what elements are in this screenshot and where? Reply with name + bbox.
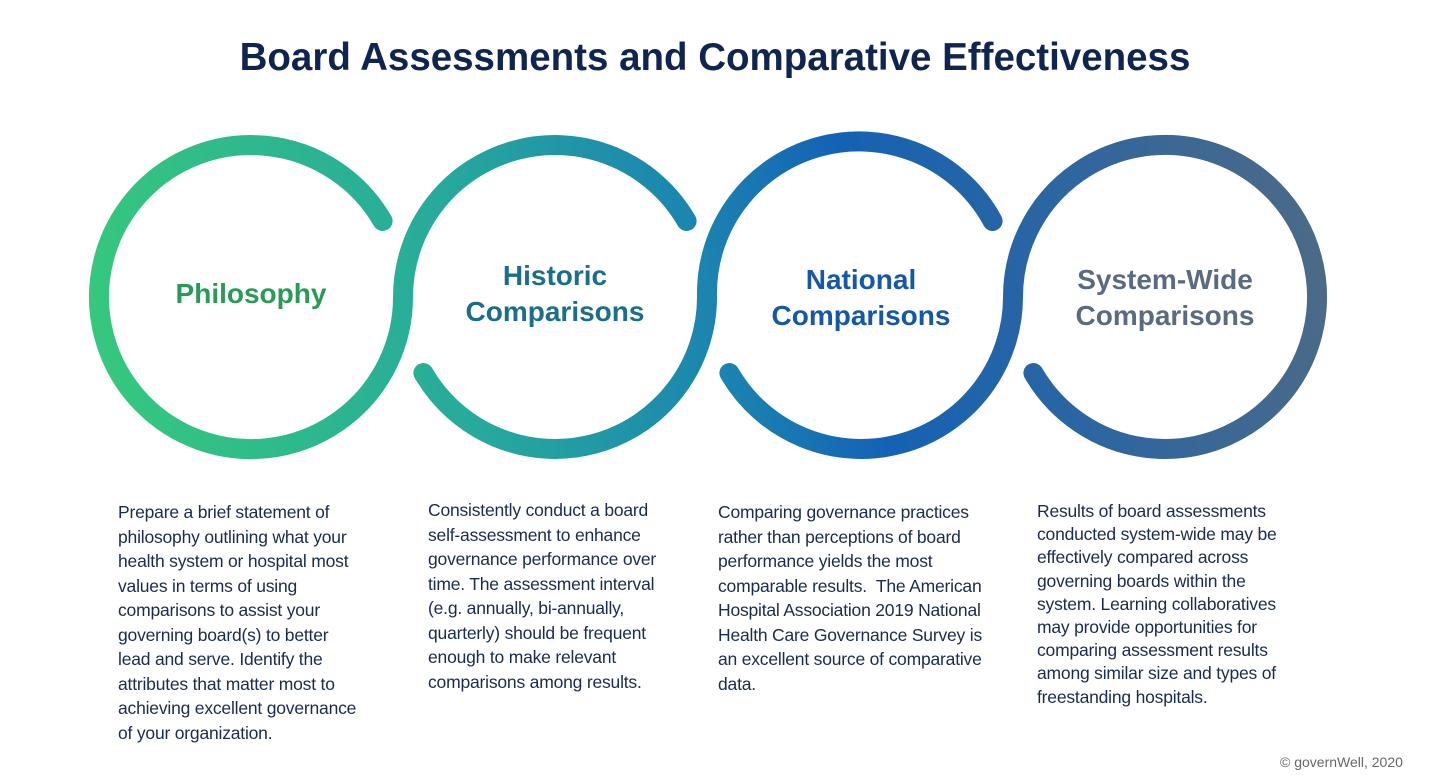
text: historic: Consistently conduct a board xyxy=(428,500,648,520)
text: philosophy xyxy=(118,502,356,742)
text: national: Comparing governance practices xyxy=(718,502,969,522)
text: historic: (e.g. annually, bi-annually, xyxy=(428,598,624,618)
heading: Historic Comparisons: Comparisons xyxy=(466,296,644,327)
heading: System-Wide Comparisons: Comparisons xyxy=(1076,300,1254,331)
text: philosophy: values in terms of using xyxy=(118,576,297,596)
text: system-wide: conducted system-wide may be xyxy=(1037,524,1277,544)
text: historic: governance performance over xyxy=(428,549,656,569)
text: philosophy: attributes that matter most to xyxy=(118,674,335,694)
text: system-wide: may provide opportunities for xyxy=(1037,617,1257,637)
text: national: comparable results. The American xyxy=(718,576,981,596)
text: system-wide: among similar size and types of xyxy=(1037,663,1276,683)
text: philosophy: of your organization. xyxy=(118,722,272,742)
text: historic: enough to make relevant xyxy=(428,647,616,667)
text: philosophy: lead and serve. Identify the xyxy=(118,649,323,669)
heading: System-Wide Comparisons: System-Wide xyxy=(1077,264,1253,295)
text: system-wide: comparing assessment results xyxy=(1037,640,1268,660)
text: system-wide: effectively compared across xyxy=(1037,547,1248,567)
text: historic: time. The assessment interval xyxy=(428,574,654,594)
text: national: rather than perceptions of board xyxy=(718,526,961,546)
text: system-wide: governing boards within the xyxy=(1037,571,1246,591)
text: system-wide xyxy=(1037,501,1277,707)
text: national: Health Care Governance Survey is xyxy=(718,624,982,644)
text: system-wide: system. Learning collaboratives xyxy=(1037,594,1276,614)
text: philosophy: governing board(s) to better xyxy=(118,624,328,644)
heading: Philosophy: Philosophy xyxy=(176,278,326,309)
text: national xyxy=(718,502,982,694)
text: national: an excellent source of comparative xyxy=(718,649,982,669)
text: national: performance yields the most xyxy=(718,551,932,571)
text: philosophy: philosophy outlining what your xyxy=(118,526,346,546)
heading: National Comparisons xyxy=(772,264,950,331)
heading: National Comparisons: Comparisons xyxy=(772,300,950,331)
text: philosophy: comparisons to assist your xyxy=(118,600,320,620)
heading: Historic Comparisons xyxy=(466,260,644,327)
text: system-wide: Results of board assessments xyxy=(1037,501,1266,521)
text: philosophy: health system or hospital most xyxy=(118,551,348,571)
text: national: Hospital Association 2019 National xyxy=(718,600,981,620)
text: philosophy: achieving excellent governance xyxy=(118,698,356,718)
text: national: data. xyxy=(718,674,756,694)
text: historic: quarterly) should be frequent xyxy=(428,622,646,642)
copyright: © governWell, 2020 xyxy=(1280,754,1403,770)
heading: System-Wide Comparisons xyxy=(1076,264,1254,331)
text: historic xyxy=(428,500,656,692)
text: system-wide: freestanding hospitals. xyxy=(1037,687,1208,707)
text: historic: comparisons among results. xyxy=(428,672,642,692)
text: philosophy: Prepare a brief statement of xyxy=(118,502,329,522)
heading: National Comparisons: National xyxy=(806,264,916,295)
text: historic: self-assessment to enhance xyxy=(428,524,641,544)
title: Board Assessments and Comparative Effectiveness xyxy=(240,36,1190,79)
heading: Historic Comparisons: Historic xyxy=(503,260,607,291)
